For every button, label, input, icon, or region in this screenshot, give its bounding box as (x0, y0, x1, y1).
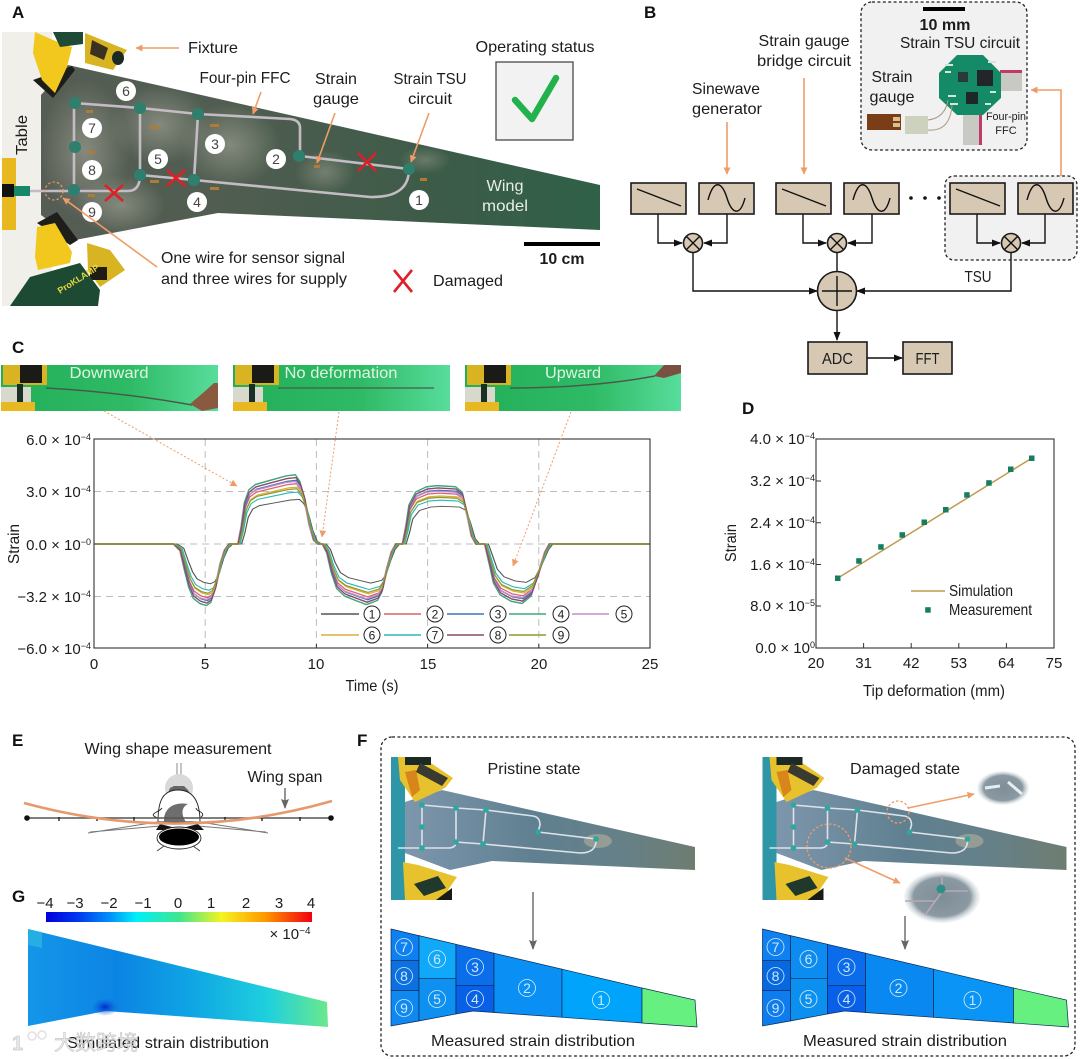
x-axis labels (6, 524, 658, 695)
y labels: 8.0 × 10 (750, 598, 805, 615)
x labels: 31 (855, 655, 872, 672)
measured map: pristine: 1 (597, 992, 605, 1008)
measured map: damaged: 3 (843, 959, 851, 975)
measured map: pristine: 5 (433, 991, 441, 1007)
x labels: 75 (1046, 655, 1062, 672)
legend: Simulation (949, 583, 1013, 600)
y-axis labels: −4 (81, 484, 91, 494)
watermark: 大数跨境 (54, 1032, 138, 1055)
channel legend: 2 (432, 608, 439, 622)
node number badges: 6 (122, 83, 130, 99)
panel E: aircraft wing shape (12, 731, 334, 851)
panel label D: D (742, 399, 754, 418)
annotations: gauge (313, 91, 359, 108)
y labels: −5 (805, 598, 815, 608)
y labels (750, 431, 815, 657)
simulated wing map (28, 929, 328, 1027)
x-axis labels: 10 (308, 656, 324, 673)
x labels (723, 524, 1062, 700)
x labels: Strain (723, 524, 740, 562)
signal connectors (658, 214, 1045, 358)
annotations: Four-pin FFC (200, 70, 290, 87)
annotations: Operating status (476, 39, 594, 56)
annotations: Damaged (433, 273, 503, 290)
plot frame and ticks (816, 439, 1054, 648)
FFT block (903, 342, 952, 374)
labels above blocks: generator (692, 101, 763, 118)
colour bar: −1 (134, 895, 152, 912)
y-axis labels: 3.0 × 10 (26, 484, 81, 501)
photo: no deformation (233, 365, 450, 411)
panel B: TSU block diagram (631, 2, 1077, 374)
measured map: pristine: 2 (523, 980, 531, 996)
strain chart (6, 432, 663, 695)
colour bar: 3 (275, 895, 283, 912)
colour bar: −4 (36, 895, 54, 912)
y labels: 0 (810, 640, 815, 650)
annotations: model (482, 198, 528, 215)
measured map: pristine (391, 929, 697, 1027)
x labels: 42 (903, 655, 920, 672)
map captions: Measured strain distribution (431, 1033, 635, 1050)
node number badges: 3 (211, 136, 219, 152)
wing span label (248, 769, 322, 808)
channel legend: 1 (369, 608, 376, 622)
channel legend: 9 (558, 628, 565, 642)
multipliers (684, 234, 1020, 252)
x-axis labels: Time (s) (346, 678, 398, 695)
photo: upward (465, 365, 681, 411)
annotations: circuit (408, 91, 453, 108)
y-axis labels: 0.0 × 10 (26, 537, 81, 554)
FFT block: FFT (916, 351, 940, 368)
labels above blocks: Sinewave (692, 81, 760, 98)
channel legend: 5 (621, 608, 628, 622)
panel label E: E (12, 731, 23, 750)
measured map: pristine: 6 (433, 951, 441, 967)
y-axis labels: −6.0 × 10 (17, 641, 81, 658)
panel label F: F (357, 731, 367, 750)
colour bar (36, 895, 315, 943)
node number badges: 5 (154, 151, 162, 167)
measured map: pristine: 9 (400, 1000, 408, 1016)
node number badges (82, 81, 429, 222)
colour bar: 0 (174, 895, 182, 912)
inset: strain TSU circuit (861, 2, 1027, 150)
x labels: 20 (808, 655, 824, 672)
annotations: One wire for sensor signal (161, 250, 345, 267)
channel legend (321, 606, 632, 643)
annotations (14, 39, 594, 290)
colour bar: −3 (66, 895, 84, 912)
measured map: damaged: 1 (969, 992, 977, 1008)
channel legend: 7 (432, 628, 439, 642)
ramp and sine blocks (631, 183, 1073, 214)
y-axis labels: −3.2 × 10 (17, 589, 81, 606)
colour bar: −4 (299, 926, 311, 937)
measured map: damaged (762, 929, 1068, 1027)
colour bar: 2 (242, 895, 250, 912)
panel G: simulated strain distribution (12, 887, 328, 1055)
measured map: damaged: 4 (843, 991, 851, 1007)
pristine photo (391, 757, 695, 900)
photo: table and wing: ProKLAMP (56, 262, 101, 296)
panel D: strain vs tip deformation (723, 399, 1062, 700)
photo: downward: Downward (70, 365, 148, 382)
map captions (431, 1033, 1007, 1050)
wing span label: Wing span (248, 769, 322, 786)
inset: strain TSU circuit: 10 mm (920, 17, 970, 34)
photo: upward: Upward (545, 365, 601, 382)
labels above blocks: TSU (964, 269, 992, 286)
measured map: damaged: 7 (772, 939, 780, 955)
x-axis labels: 0 (90, 656, 98, 673)
wiring harness and TSU nodes (30, 97, 427, 197)
ADC block (808, 342, 867, 374)
scale bar 10 cm (524, 242, 600, 268)
strain curves for channels 1–9 (93, 475, 663, 606)
scale bar 10 cm: 10 cm (540, 251, 584, 268)
y-axis labels: −4 (81, 641, 91, 651)
measured map: damaged: 9 (772, 1000, 780, 1016)
annotations: and three wires for supply (161, 271, 347, 288)
measured map: pristine: 8 (400, 968, 408, 984)
x-axis labels: 25 (642, 656, 658, 673)
y labels: 1.6 × 10 (750, 557, 805, 574)
dotted arrows from photos to chart (104, 411, 571, 566)
labels above blocks (692, 33, 992, 286)
node number badges: 4 (193, 194, 201, 210)
continuation dots (909, 196, 941, 200)
y-axis labels: −4 (81, 432, 91, 442)
measured map: damaged: 2 (895, 980, 903, 996)
inset: strain TSU circuit: FFC (995, 125, 1017, 137)
annotations: Fixture (188, 40, 238, 57)
photo: table and wing (2, 32, 600, 306)
map captions: Measured strain distribution (803, 1033, 1007, 1050)
measured map: damaged: 5 (805, 991, 813, 1007)
node number badges: 9 (88, 204, 96, 220)
y-axis labels: −4 (81, 589, 91, 599)
x labels: 53 (950, 655, 967, 672)
x labels: Tip deformation (mm) (863, 683, 1005, 700)
legend (911, 583, 1032, 619)
y labels: 2.4 × 10 (750, 515, 805, 532)
measured map: pristine: 7 (400, 939, 408, 955)
panel label A: A (12, 3, 24, 22)
node number badges: 8 (88, 162, 96, 178)
state labels: Damaged state (850, 761, 960, 778)
damage markers (105, 153, 412, 292)
summing junction (818, 272, 856, 310)
colour bar: −2 (100, 895, 118, 912)
caption: Simulated strain distribution (67, 1035, 269, 1052)
panel F: pristine vs damaged comparison (357, 731, 1075, 1056)
channel legend: 3 (495, 608, 502, 622)
legend: Measurement (949, 602, 1032, 619)
panel label C: C (12, 338, 24, 357)
colour bar: × 10 (269, 926, 299, 943)
title: Wing shape measurement (84, 741, 272, 758)
dashed frame (381, 737, 1075, 1056)
operating status check box (496, 62, 573, 140)
y-axis labels (17, 432, 91, 658)
x-axis labels: 20 (531, 656, 547, 673)
y-axis labels: 6.0 × 10 (26, 432, 81, 449)
annotations: Table (14, 115, 31, 155)
state labels: Pristine state (488, 761, 581, 778)
node number badges: 2 (272, 151, 280, 167)
photo: no deformation: No deformation (284, 365, 398, 382)
inset: strain TSU circuit: Four-pin (986, 111, 1026, 123)
x-axis labels: 5 (201, 656, 209, 673)
channel legend: 4 (558, 608, 565, 622)
y labels: −4 (805, 515, 815, 525)
measured map: pristine: 3 (471, 959, 479, 975)
damage callouts (807, 771, 1029, 923)
annotations: Wing (486, 178, 524, 195)
inset: strain TSU circuit: Strain TSU circuit (900, 35, 1021, 52)
y labels: −4 (805, 557, 815, 567)
state labels (488, 761, 960, 778)
simulation line (838, 458, 1032, 578)
panel C: strain time series (1, 338, 681, 695)
y-axis labels: −0 (81, 537, 91, 547)
y labels: −4 (805, 473, 815, 483)
panel label G: G (12, 887, 25, 906)
y labels: 4.0 × 10 (750, 431, 805, 448)
panel A: wing model photo (2, 3, 600, 306)
ADC block: ADC (822, 351, 853, 368)
x labels: 64 (998, 655, 1015, 672)
orange arrows (727, 78, 1061, 176)
measured map: damaged: 6 (805, 951, 813, 967)
x-axis labels: 15 (420, 656, 436, 673)
aircraft front view (24, 763, 334, 851)
panel label B: B (644, 3, 656, 22)
inset: strain TSU circuit: Strain (872, 69, 912, 86)
measured map: pristine: 4 (471, 991, 479, 1007)
photo: downward (1, 365, 218, 411)
colour bar: 4 (307, 895, 315, 912)
x-axis labels: Strain (6, 524, 23, 564)
annotations: Strain (315, 71, 357, 88)
labels above blocks: Strain gauge (758, 33, 850, 50)
grey arrows (533, 892, 905, 949)
TSU dashed group (945, 176, 1077, 260)
y labels: −4 (805, 431, 815, 441)
colour bar: 1 (207, 895, 215, 912)
callout arrows (45, 48, 429, 267)
damaged photo (762, 757, 1066, 900)
channel legend: 6 (369, 628, 376, 642)
wing deformation curve (24, 801, 332, 824)
inset: strain TSU circuit: gauge (870, 89, 915, 106)
y labels: 3.2 × 10 (750, 473, 805, 490)
measurement points (835, 456, 1034, 581)
annotations: Strain TSU (394, 71, 466, 88)
node number badges: 7 (88, 120, 96, 136)
channel legend: 8 (495, 628, 502, 642)
y labels: 0.0 × 10 (755, 640, 810, 657)
watermark (12, 1031, 138, 1055)
node number badges: 1 (415, 192, 423, 208)
watermark: 1 (12, 1033, 23, 1055)
labels above blocks: bridge circuit (757, 53, 852, 70)
measured map: damaged: 8 (772, 968, 780, 984)
